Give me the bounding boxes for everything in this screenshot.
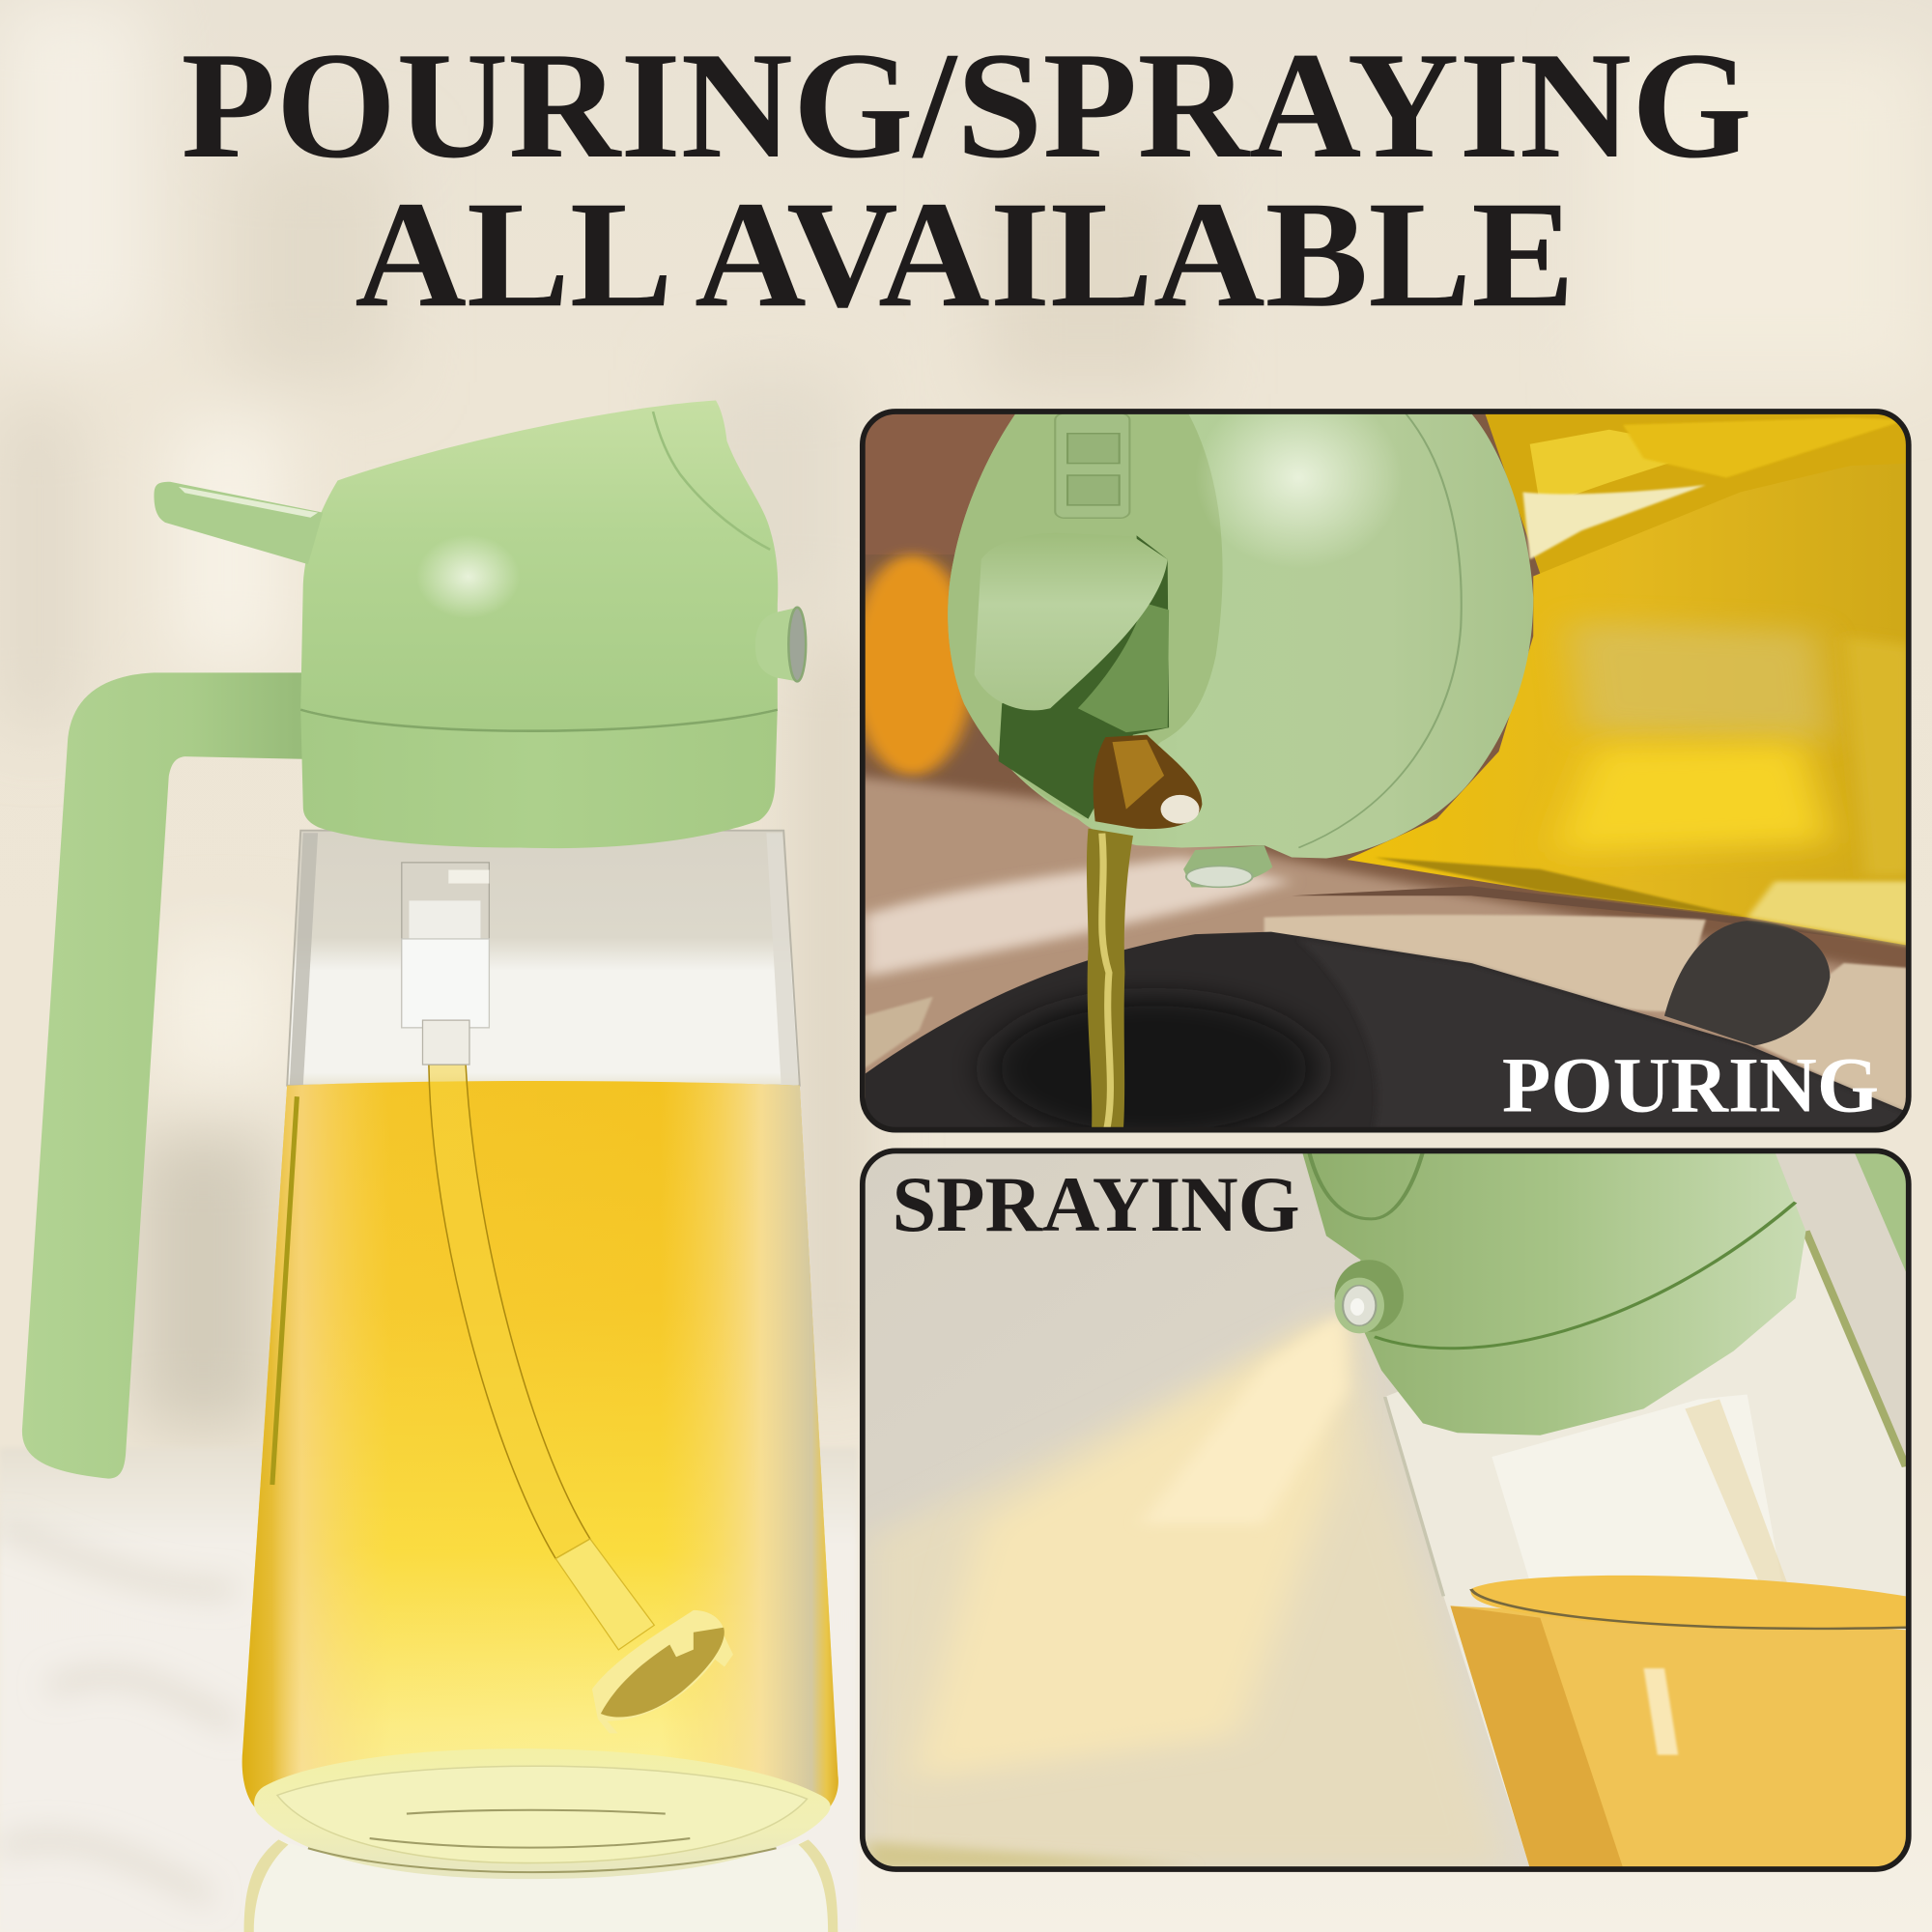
glass wall left: [290, 833, 318, 1086]
straw: [429, 1065, 590, 1559]
filter collar: [555, 1539, 654, 1650]
spray nozzle: [1335, 1260, 1404, 1333]
handle corner: [1854, 1151, 1906, 1272]
opening interior: [999, 535, 1169, 819]
glass wall right: [766, 833, 799, 1086]
flip tab: [154, 482, 323, 564]
backdrop right: [1775, 1151, 1906, 1620]
nozzle: [1183, 845, 1272, 888]
product: oil bottle with green lid: [22, 401, 838, 1932]
title: POURING/SPRAYING: [182, 21, 1752, 190]
oil: [1451, 1576, 1906, 1867]
backdrop: [866, 414, 1906, 1110]
title: [182, 21, 1752, 339]
spray nozzle button: [755, 608, 806, 681]
glass bottle with oil: [1347, 413, 1913, 947]
rim line: [1298, 413, 1462, 848]
lid seam: [300, 710, 778, 731]
title: ALL AVAILABLE: [355, 170, 1575, 339]
round cap arc: [1309, 1151, 1423, 1219]
green lid: [948, 413, 1533, 858]
pouring label: POURING: [1502, 1041, 1879, 1129]
glass body upper: [287, 831, 800, 1086]
base inner ring: [277, 1766, 807, 1863]
head seam: [1375, 1203, 1796, 1349]
lid dome: [300, 401, 778, 730]
olive wall line: [272, 1096, 297, 1485]
lid lower ring: [300, 708, 778, 848]
lid left face: [948, 413, 1223, 819]
spray mist: [867, 1313, 1506, 1870]
handle: [22, 672, 303, 1479]
glass bottle: [1385, 1231, 1906, 1867]
panel: spraying: [860, 1149, 1911, 1872]
flap: [975, 533, 1168, 710]
pump: [402, 863, 489, 1065]
spout hole: [1094, 735, 1202, 829]
bottle base: [254, 1748, 831, 1879]
oil stream: [1087, 829, 1133, 1129]
pan: [866, 921, 1907, 1141]
dome highlight: [416, 535, 520, 618]
switch: [1055, 413, 1129, 518]
filter disc: [592, 1610, 733, 1733]
oil fill: [242, 1081, 838, 1839]
bottle reflection: [244, 1839, 838, 1932]
panel: pouring: [850, 386, 1932, 1150]
spout arc: [653, 412, 770, 550]
base texture lines: [308, 1810, 777, 1872]
green nozzle head: [1302, 1151, 1805, 1435]
lid highlight: [1206, 414, 1389, 558]
spraying label: SPRAYING: [892, 1160, 1300, 1248]
